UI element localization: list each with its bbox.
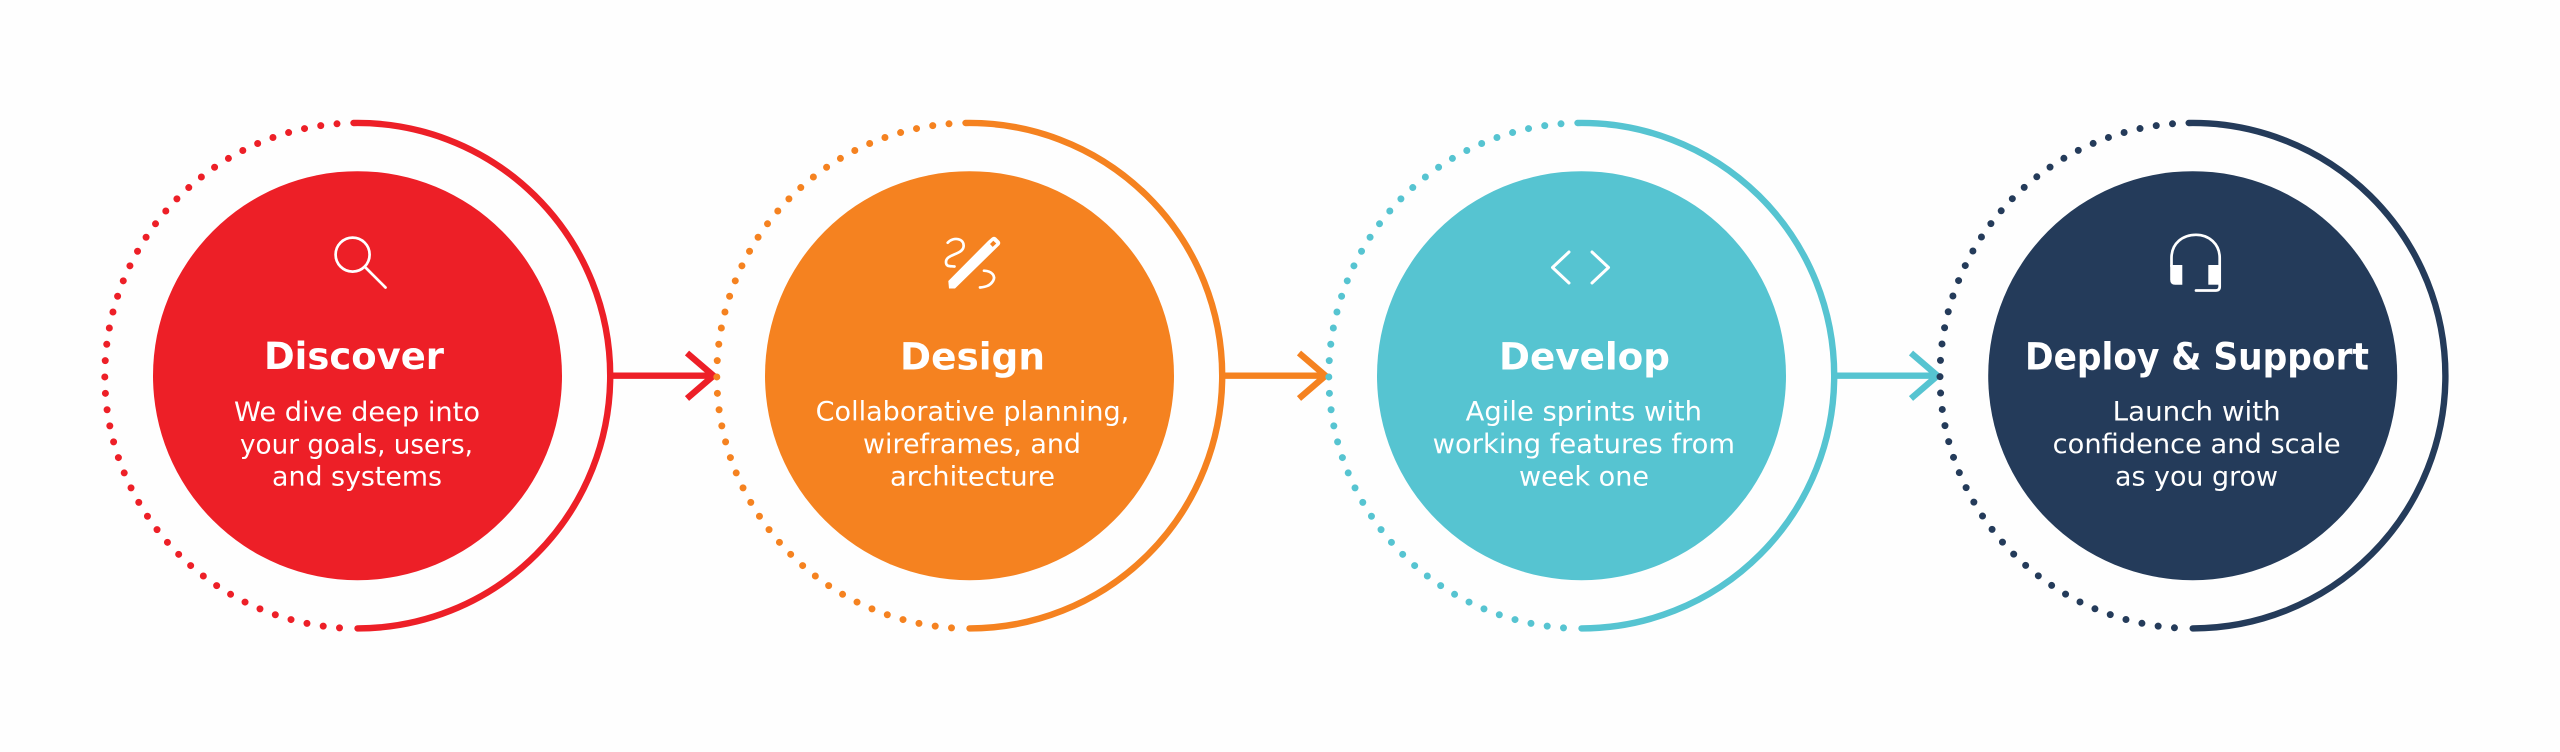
filled circle: design [765, 171, 1174, 580]
dotted ring half: deploy [1940, 124, 2176, 628]
panel: design [717, 123, 1222, 628]
description: discover: We dive deep into [234, 397, 480, 428]
description: deploy and support: as you grow [2115, 462, 2278, 493]
panel: discover [105, 123, 610, 628]
solid ring half: discover [354, 123, 610, 628]
description: design [816, 397, 1129, 493]
solid ring half: design [966, 123, 1222, 628]
description: design: architecture [890, 462, 1055, 493]
filled circle: discover [153, 171, 562, 580]
heading: design: Design [900, 334, 1045, 378]
description: develop: Agile sprints with [1466, 397, 1702, 428]
filled circle: develop [1377, 171, 1786, 580]
arrow: discover to design [612, 353, 714, 398]
dotted ring half: discover [105, 124, 340, 628]
description: design: Collaborative planning, [816, 397, 1129, 428]
heading: develop: Develop [1499, 334, 1670, 378]
arrow: design to develop [1224, 353, 1326, 398]
icon: code brackets [1552, 252, 1608, 283]
description: discover [234, 397, 480, 493]
panel: deploy and support [1940, 123, 2445, 628]
description: develop: week one [1519, 462, 1649, 493]
filled circle: deploy [1988, 171, 2397, 580]
description: deploy and support [2053, 397, 2341, 493]
solid ring half: deploy [2189, 123, 2445, 628]
dotted ring half: design [717, 124, 952, 628]
icon: pencil with squiggles [946, 237, 1000, 288]
arrow: develop to deploy [1836, 353, 1938, 398]
description: design: wireframes, and [863, 429, 1081, 460]
description: discover: your goals, users, [240, 430, 473, 460]
heading: deploy and support: Deploy & Support [2025, 334, 2369, 378]
panel: develop [1329, 123, 1834, 628]
icon: magnifying glass [336, 238, 386, 288]
icon: headset [2170, 235, 2220, 290]
description: develop: working features from [1433, 429, 1735, 460]
description: discover: and systems [272, 462, 442, 493]
solid ring half: develop [1578, 123, 1834, 628]
heading: discover: Discover [264, 334, 444, 378]
description: deploy and support: Launch with [2113, 397, 2281, 428]
description: develop [1433, 397, 1735, 493]
description: deploy and support: confidence and scale [2053, 429, 2341, 460]
dotted ring half: develop [1329, 124, 1564, 628]
